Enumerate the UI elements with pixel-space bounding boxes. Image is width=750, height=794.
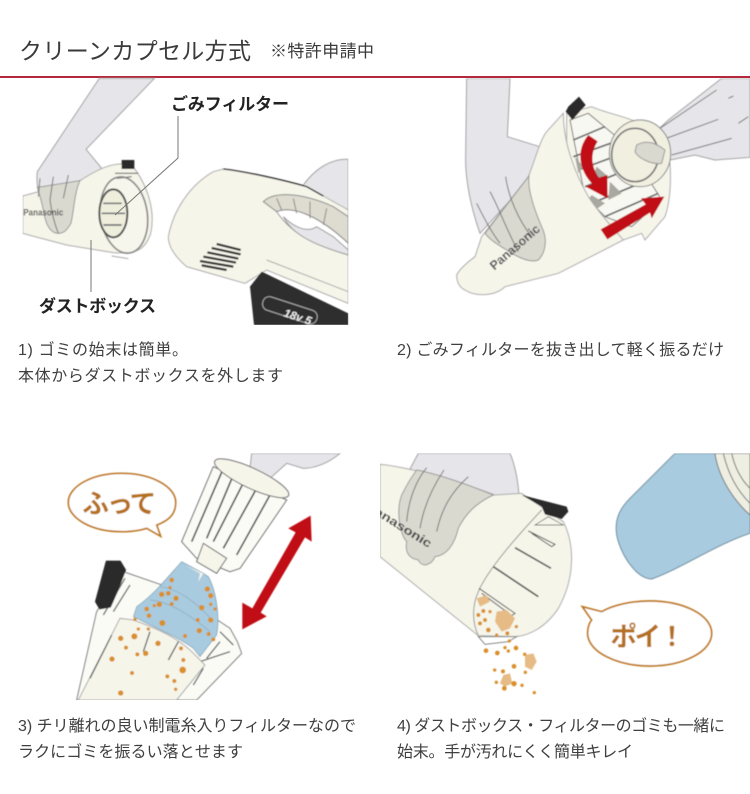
speech bubble: poi [582,601,712,666]
latch [96,562,125,608]
patent note: ※特許申請中 [270,42,374,61]
caption 2: 2) ごみフィルターを抜き出して軽く振るだけ [397,341,724,359]
latch [522,495,568,519]
label: filter: ごみフィルター [171,94,289,114]
filter disc [609,120,671,187]
caption 3: ラクにゴミを振るい落とせます [18,742,243,761]
illustration: pulling out the filter: Panasonic [487,222,543,273]
label: dust box: ダストボックス [39,296,156,316]
leader line: filter [115,116,178,215]
panel: step 4 [363,453,750,761]
caption 4: 4) ダストボックス・フィルターのゴミも一緒に [397,716,725,735]
illustration: shaking the filter: ふって [82,489,156,519]
blue filter cone [133,562,218,657]
illustration: removing the dust box: Panasonic [23,207,63,217]
illustration: discarding the dust [363,453,750,694]
dust dots [109,578,217,696]
caption 1: 1) ゴミの始末は簡単。 [18,340,188,359]
panel: step 2 [397,78,750,359]
illustration: discarding the dust: Panasonic [363,499,435,551]
header rule [0,76,750,78]
dust box [380,464,572,637]
panel: step 3 [18,452,356,761]
caption 4: 始末。手が汚れにくく簡単キレイ [397,743,633,761]
header [0,38,750,78]
illustration: discarding the dust: ポイ！ [610,622,685,652]
slots [479,517,563,616]
vacuum body [168,169,348,303]
arrow: shake [242,516,312,629]
illustration: removing the dust box [23,78,348,328]
dust box body [78,618,205,700]
battery [250,272,348,325]
dust box frame [77,572,242,700]
speech bubble: furi [68,473,176,536]
caption 1: 本体からダストボックスを外します [18,367,283,385]
arrow: pull out [601,197,664,239]
leader line: dust box [90,240,92,292]
filter cage [182,467,287,572]
vacuum body [457,113,623,295]
illustration: pulling out the filter [457,78,750,295]
dust dots [476,609,536,694]
panel: step 1 [18,78,348,385]
illustration: shaking the filter [68,452,340,700]
blue vacuum part [616,453,750,579]
caption 3: 3) チリ離れの良い制電糸入りフィルターなので [18,717,356,735]
body back rim [567,107,670,240]
title: クリーンカプセル方式 [19,38,251,64]
arrow: twist [580,135,608,198]
illustration: removing the dust box: 18v 5 [282,308,314,328]
